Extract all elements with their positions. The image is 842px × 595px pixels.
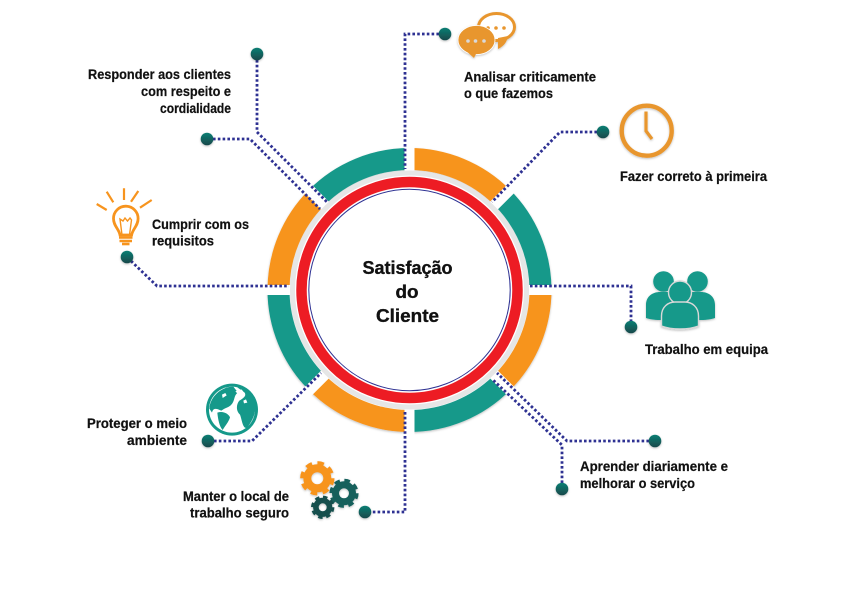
text: Analisar criticamente: Analisar criticamente <box>464 70 596 84</box>
text: Proteger o meio ambiente: ambiente <box>127 433 187 448</box>
icon: globe <box>206 384 258 436</box>
text: Aprender diariamente <box>580 459 728 491</box>
connector lines <box>131 34 649 512</box>
text: Proteger o meio ambiente <box>87 416 187 448</box>
connector end dots <box>121 28 661 518</box>
centre title: Satisfação <box>362 257 452 278</box>
ring gaps <box>260 140 560 440</box>
grey inner ring <box>292 173 526 407</box>
text: Trabalho em equipa: Trabalho em equipa <box>645 342 769 357</box>
icon: light bulb <box>97 188 152 244</box>
icon: clock <box>622 106 672 156</box>
centre title <box>362 257 452 326</box>
central ring diagram <box>260 140 560 440</box>
centre title: do <box>396 281 418 302</box>
text: Aprender diariamente: Aprender diariamente e <box>580 459 728 474</box>
text: Manter o local de trabalho seguro <box>183 489 289 520</box>
text: Responder aos clientes <box>88 67 231 116</box>
icon: team of people <box>646 271 715 329</box>
red ring <box>302 182 518 398</box>
text: Cumprir com os requisitos: requisitos <box>152 234 214 248</box>
text: Responder aos clientes: com respeito e <box>141 84 231 99</box>
text: Cumprir com os requisitos <box>152 217 249 248</box>
text: Analisar criticamente <box>464 70 596 101</box>
icon: speech bubbles <box>458 14 514 58</box>
text: Responder aos clientes: cordialidade <box>160 101 231 116</box>
text: Cumprir com os requisitos: Cumprir com os <box>152 217 249 232</box>
outer ring segments <box>278 159 540 421</box>
text: Manter o local de trabalho seguro: trabalho seguro <box>190 506 289 520</box>
text: Manter o local de trabalho seguro: Manter o local de <box>183 489 289 504</box>
text: Aprender diariamente: melhorar o serviço <box>580 476 695 491</box>
centre title: Cliente <box>376 305 439 326</box>
text: Responder aos clientes: Responder aos clientes <box>88 67 231 82</box>
text: Proteger o meio ambiente: Proteger o meio <box>87 416 187 431</box>
icon: gears <box>303 464 356 517</box>
text: Analisar criticamente: o que fazemos <box>464 86 553 101</box>
text: Fazer correto à primeira: Fazer correto à primeira <box>620 169 768 184</box>
navy inner outline <box>309 189 510 391</box>
